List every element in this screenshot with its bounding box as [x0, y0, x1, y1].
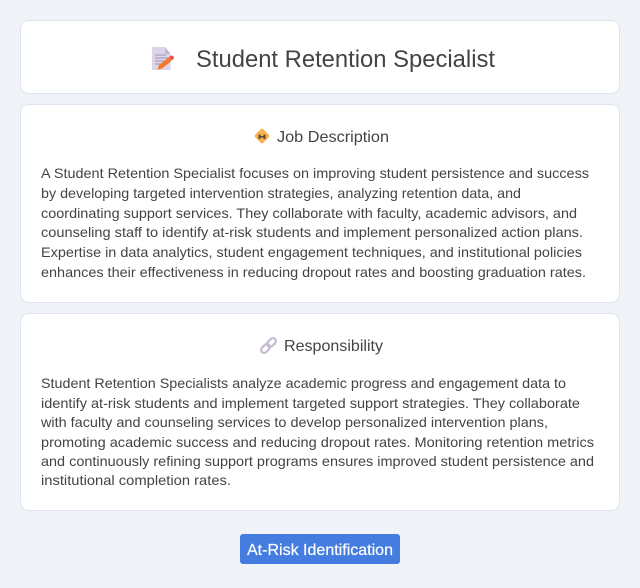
text block: responsibility: promoting academic success and reducing dropout rates. Monitoring retention metrics: [41, 434, 594, 450]
text block: responsibility: and continuously refining support programs ensures improved student persistence and: [41, 453, 594, 469]
button: at-risk identification: At-Risk Identification: [247, 542, 393, 559]
text block: job description: counseling staff to identify at-risk students and implement personalized action plans.: [41, 224, 583, 240]
icon: document with pencil: [152, 47, 174, 70]
panel: title card: [20, 20, 620, 94]
text block: job description: Expertise in data analytics, student engagement techniques, and institutional policies: [41, 244, 582, 260]
title: Student Retention Specialist: [196, 46, 495, 73]
text block: job description: enhances their effectiveness in reducing dropout rates and boosting graduation rates.: [41, 264, 586, 280]
heading: responsibility: Responsibility: [284, 338, 383, 355]
icon: construction diamond: [254, 128, 270, 144]
text block: responsibility: Student Retention Specialists analyze academic progress and engagement data to: [41, 375, 566, 391]
heading: job description: Job Description: [277, 129, 389, 146]
text block: job description: by developing targeted intervention strategies, analyzing retention data, and: [41, 185, 521, 201]
text block: responsibility: [40, 375, 594, 488]
panel: job description: [20, 104, 620, 302]
text block: responsibility: with faculty and counseling services to develop personalized intervention plans,: [40, 414, 548, 430]
text block: job description: coordinating support services. They collaborate with faculty, academic advisors, and: [41, 205, 577, 221]
text block: responsibility: identify at-risk students and implement targeted support strategies. They collaborate: [41, 395, 580, 411]
panel: responsibility: [20, 314, 620, 510]
icon: chain link: [260, 337, 277, 354]
text block: job description: [41, 165, 589, 280]
button: at-risk identification: [240, 534, 400, 564]
text block: job description: A Student Retention Specialist focuses on improving student persistence and success: [41, 165, 589, 181]
text block: responsibility: institutional completion rates.: [41, 472, 231, 488]
